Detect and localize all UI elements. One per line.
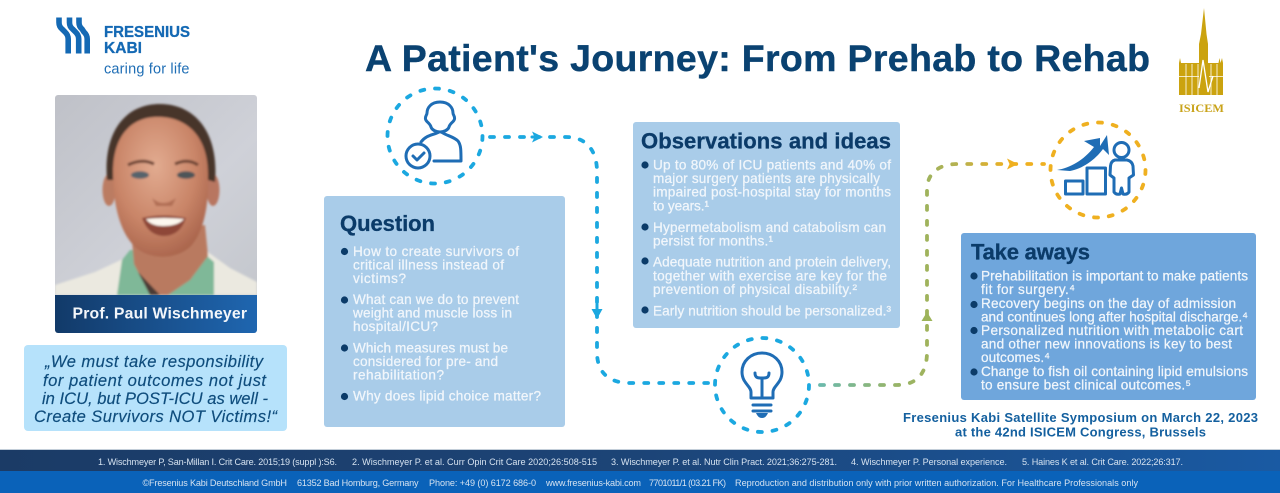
title: A Patient's Journey: From Prehab to Rehab	[365, 37, 1150, 79]
panel: question: considered for pre- and	[353, 354, 498, 369]
panel: observations and ideas: Up to 80% of ICU patients and 40% of	[653, 158, 891, 172]
panel: take aways: Prehabilitation is important to make patients	[981, 268, 1248, 284]
heading: question: Question	[340, 211, 435, 236]
imprint: Phone: +49 (0) 6172 686-0	[429, 478, 536, 488]
panel: question: rehabilitation?	[353, 368, 444, 382]
imprint: 7701011/1 (03.21 FK)	[649, 478, 726, 488]
panel: observations and ideas: impaired post-hospital stay for months	[653, 184, 891, 200]
hair	[107, 104, 215, 182]
references	[98, 457, 1183, 467]
panel: take aways: outcomes.⁴	[981, 350, 1050, 365]
panel: take aways: fit for surgery.⁴	[981, 282, 1075, 297]
eyes	[131, 171, 149, 179]
panel: question: Why does lipid choice matter?	[353, 388, 541, 404]
references: 4. Wischmeyer P. Personal experience.	[851, 457, 1007, 467]
heading: observations: Observations and ideas	[641, 128, 891, 154]
panel: observations and ideas: Early nutrition should be personalized.³	[653, 304, 891, 318]
references: 5. Haines K et al. Crit Care. 2022;26:317.	[1022, 457, 1183, 467]
quote box: „We must take responsibility	[44, 352, 265, 371]
arrow: green to orange dashed path from bulb to house	[820, 158, 1044, 385]
imprint: Reproduction and distribution only with prior written authorization. For Healthcare Professionals only	[735, 478, 1138, 488]
panel: question	[324, 196, 565, 427]
panel: observations and ideas: major surgery patients are physically	[653, 171, 880, 186]
mouth	[142, 216, 186, 236]
panel: take aways: Recovery begins on the day of admission	[981, 296, 1236, 311]
panel: take aways: and continues long after hospital discharge.⁴	[981, 310, 1248, 324]
panel: take aways: Personalized nutrition with metabolic cart	[981, 323, 1243, 338]
logo: Fresenius Kabi: KABI	[104, 40, 142, 57]
portrait photo	[55, 95, 257, 295]
logo: ISICEM cathedral	[1179, 8, 1224, 115]
symposium note: Fresenius Kabi Satellite Symposium on March 22, 2023	[903, 410, 1258, 425]
footer: references and imprint	[0, 449, 1280, 493]
panel: observations and ideas: prevention of physical disability.²	[653, 282, 857, 297]
symposium note	[903, 410, 1258, 440]
ears	[102, 174, 116, 206]
panel: question: weight and muscle loss in	[352, 306, 512, 320]
icon: house, bars and person in dashed circle	[1050, 122, 1146, 218]
panel: question: victims?	[353, 271, 406, 286]
references: 2. Wischmeyer P. et al. Curr Opin Crit Care 2020;26:508-515	[352, 457, 597, 467]
name banner	[55, 295, 257, 333]
panel: observations and ideas: Hypermetabolism and catabolism can	[653, 220, 886, 235]
quote box: for patient outcomes not just	[43, 371, 267, 390]
references: 1. Wischmeyer P, San-Millan I. Crit Care. 2015;19 (suppl ):S6.	[98, 457, 337, 467]
white coat	[55, 250, 257, 295]
arrow: blue dashed path from person to bulb	[490, 132, 708, 383]
face	[113, 117, 208, 257]
panel: observations and ideas: to years.¹	[653, 198, 709, 214]
symposium note: at the 42nd ISICEM Congress, Brussels	[955, 424, 1206, 440]
neck	[132, 225, 208, 295]
logo: Fresenius Kabi	[59, 18, 190, 78]
panel: take aways: Change to fish oil containing lipid emulsions	[981, 364, 1248, 379]
logo: Fresenius Kabi: FRESENIUS	[104, 24, 190, 41]
nose shadow	[152, 199, 176, 206]
panel: observations and ideas	[633, 122, 900, 328]
panel: question: hospital/ICU?	[353, 319, 438, 334]
icon: person with check in dashed circle	[388, 88, 482, 184]
heading: take aways: Take aways	[971, 240, 1090, 264]
imprint	[142, 478, 1138, 488]
icon: light bulb in dashed circle	[715, 338, 809, 432]
panel: take aways: and other new innovations is key to best	[981, 336, 1232, 352]
name banner: Prof. Paul Wischmeyer	[72, 306, 247, 322]
references: 3. Wischmeyer P. et al. Nutr Clin Pract. 2021;36:275-281.	[611, 457, 837, 467]
panel: take aways: to ensure best clinical outcomes.⁵	[981, 378, 1191, 392]
quote box: Create Survivors NOT Victims!“	[34, 407, 278, 426]
eyebrows	[128, 161, 198, 165]
quote box: in ICU, but POST-ICU as well -	[42, 389, 268, 408]
logo: Fresenius Kabi: caring for life	[104, 62, 190, 78]
logo: ISICEM cathedral: ISICEM	[1179, 101, 1224, 115]
panel: take aways	[961, 233, 1256, 400]
panel: observations and ideas: persist for months.¹	[653, 234, 773, 248]
panel: question: Which measures must be	[353, 340, 508, 356]
imprint: ©Fresenius Kabi Deutschland GmbH	[142, 478, 287, 488]
green scrubs	[117, 250, 214, 295]
quote box	[24, 345, 287, 431]
panel: question: critical illness instead of	[353, 258, 504, 272]
imprint: www.fresenius-kabi.com	[545, 478, 641, 488]
logo mark: three wavy stripes	[59, 18, 87, 54]
imprint: 61352 Bad Homburg, Germany	[297, 478, 419, 488]
panel: question: How to create survivors of	[353, 244, 519, 259]
panel: question: What can we do to prevent	[353, 292, 519, 307]
panel: observations and ideas: together with exercise are key for the	[653, 268, 887, 284]
panel: observations and ideas: Adequate nutrition and protein delivery,	[653, 254, 891, 270]
